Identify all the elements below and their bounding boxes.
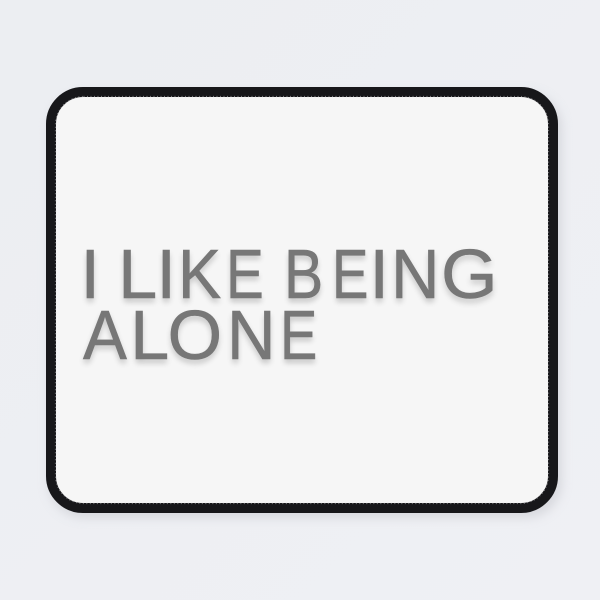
printed slogan: I: [80, 235, 100, 313]
mat drop shadow: [48, 92, 562, 518]
mat with stitched black border: [51, 92, 553, 508]
printed slogan: E: [332, 235, 369, 313]
printed slogan: O: [168, 296, 222, 374]
printed slogan: N: [391, 235, 439, 313]
printed slogan: I: [370, 235, 389, 313]
printed slogan: N: [227, 296, 275, 374]
printed slogan: K: [178, 235, 221, 313]
printed slogan: B: [284, 235, 323, 313]
printed slogan: I: [156, 235, 176, 313]
printed slogan: G: [441, 235, 498, 313]
printed slogan: L: [118, 235, 157, 313]
printed slogan: E: [280, 296, 318, 374]
printed slogan: L: [130, 296, 169, 374]
printed slogan: [80, 235, 498, 374]
printed slogan: A: [83, 296, 127, 374]
printed slogan: E: [226, 235, 264, 313]
